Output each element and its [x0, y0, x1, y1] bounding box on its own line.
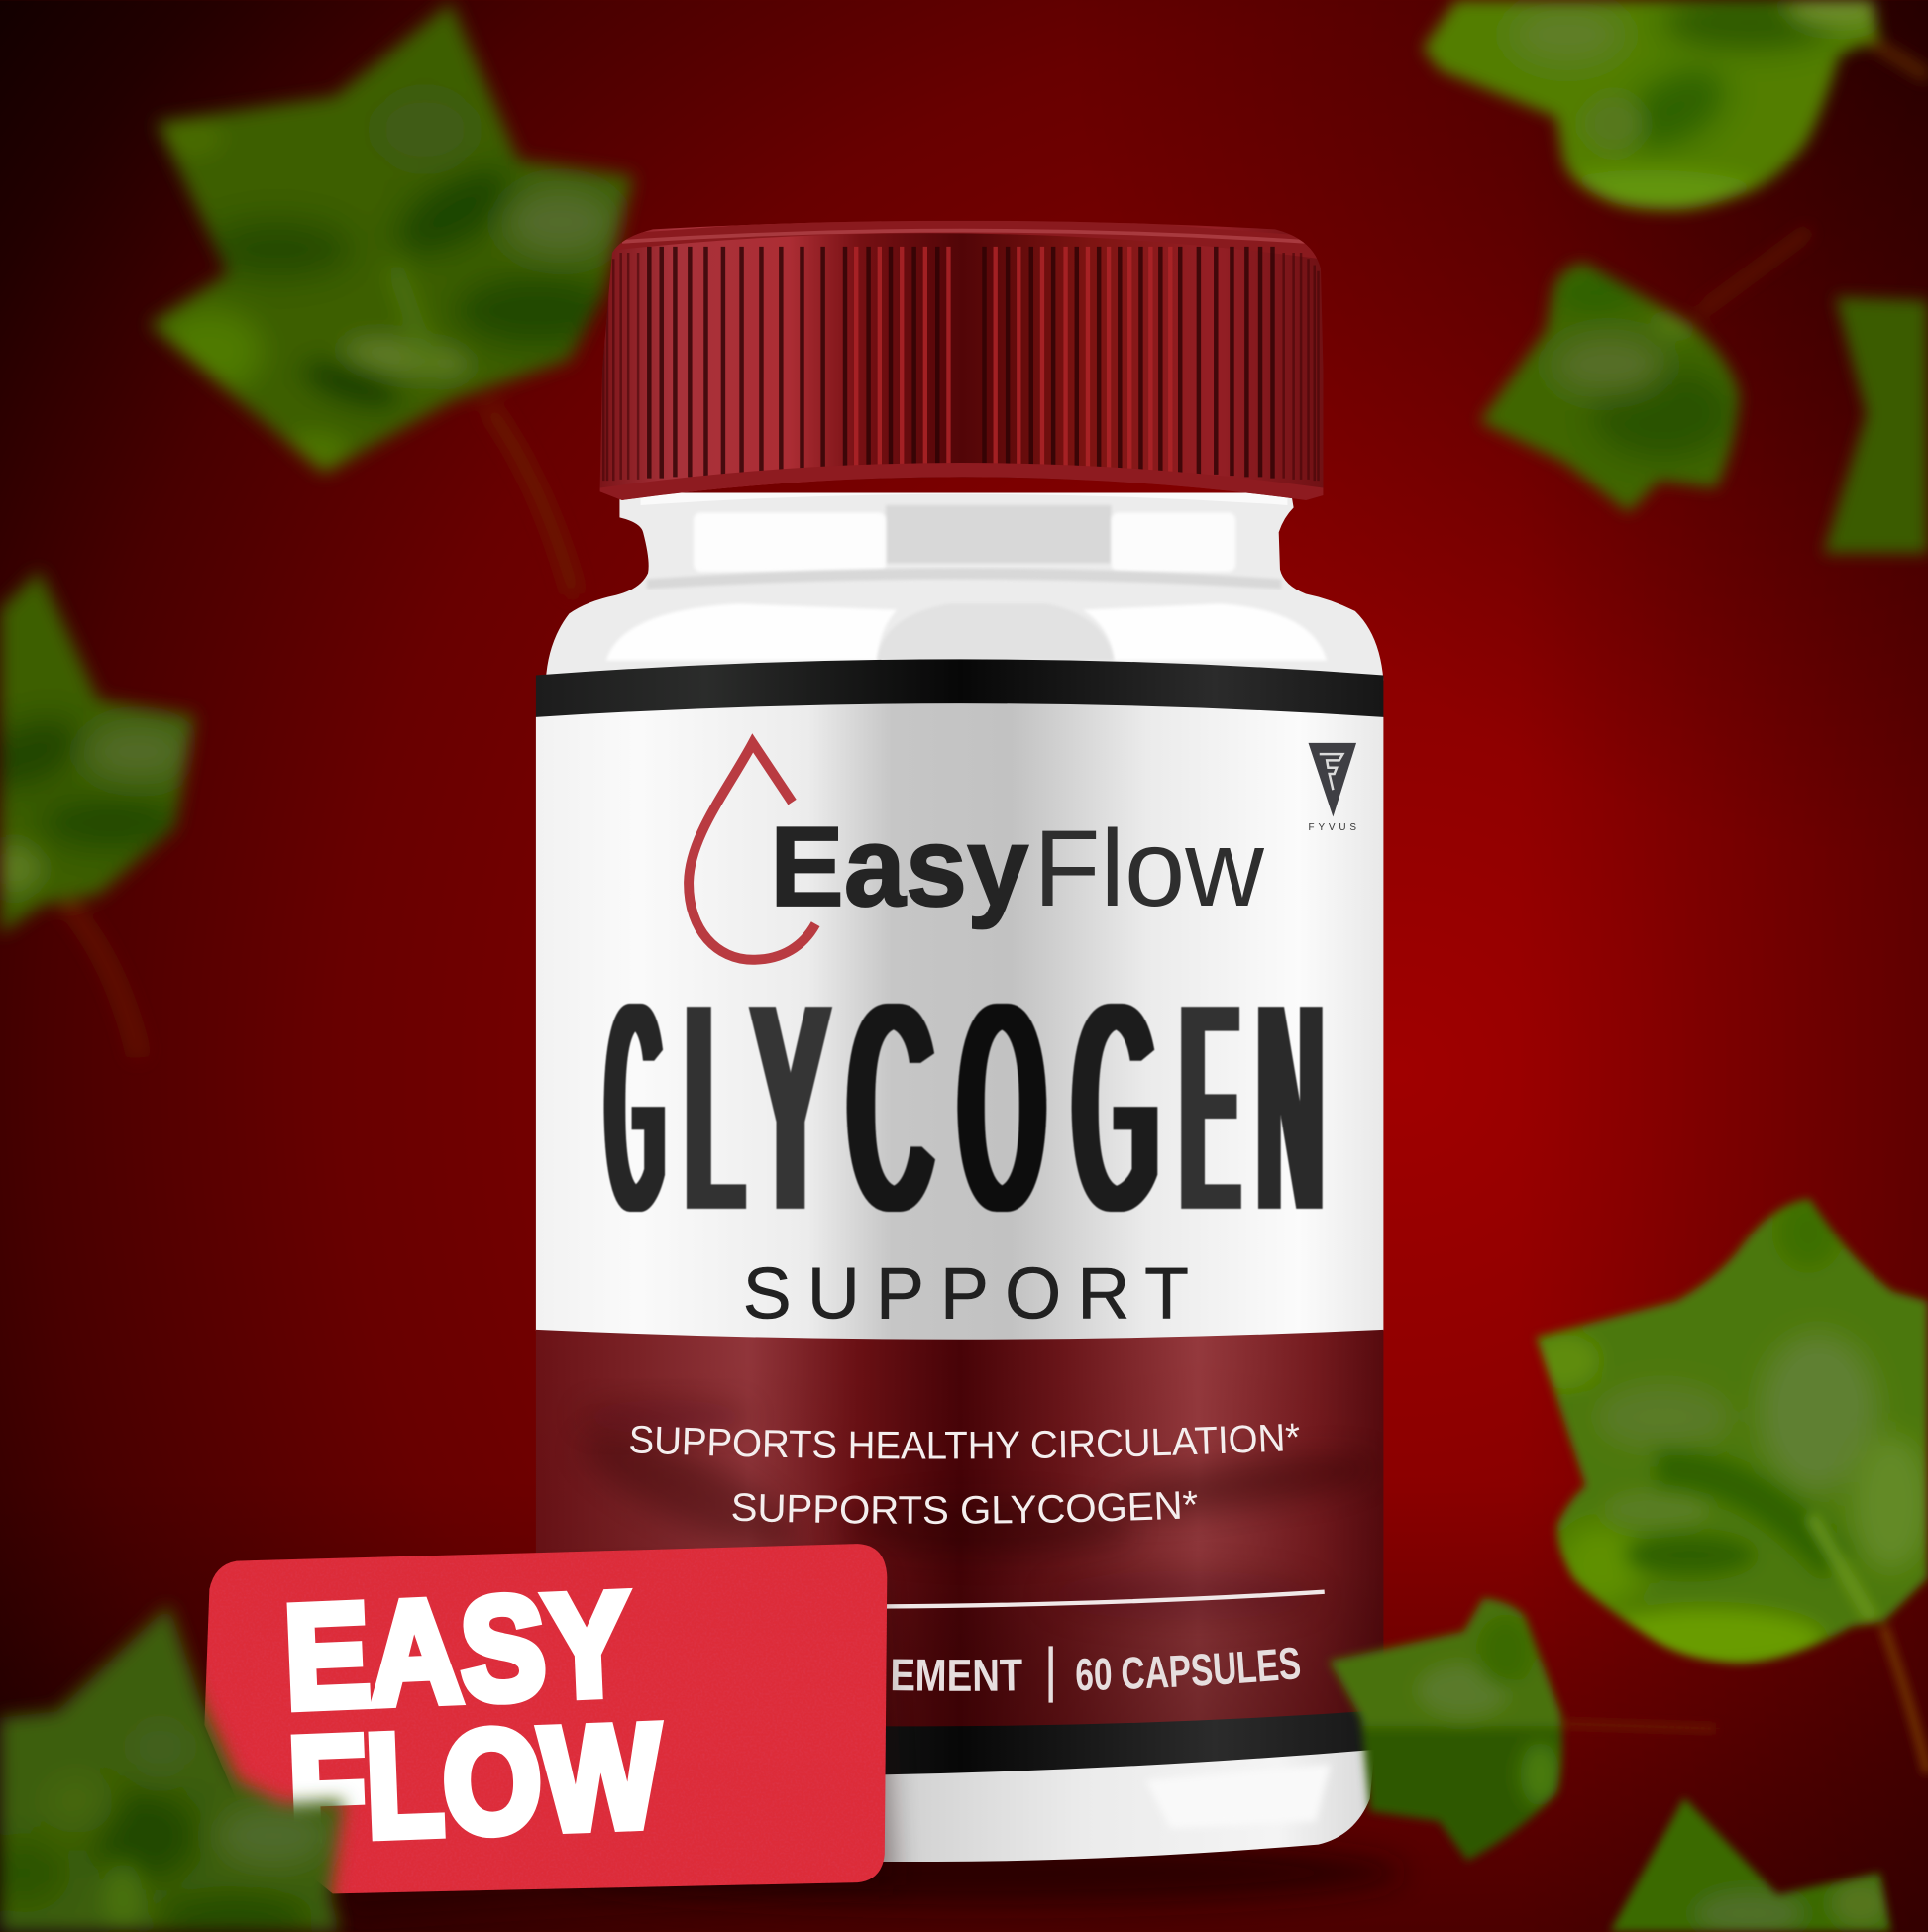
product title: GLYCOGEN: E — [1181, 935, 1239, 1279]
product title: GLYCOGEN — [606, 935, 1323, 1279]
label: capsule count: 60 CAPSULES — [1076, 1647, 1300, 1690]
bottle neck and shoulder — [546, 493, 1383, 681]
leaf: bottom centre-right, over bottle — [1330, 1598, 1716, 1863]
leaf: bottom right large — [1530, 1198, 1928, 1772]
lower black band — [536, 1710, 1383, 1778]
leaf: top left — [149, 3, 633, 593]
product bottle — [495, 220, 1423, 1920]
leaf: left edge — [0, 571, 194, 1057]
bottle base — [536, 1750, 1375, 1862]
claim: glycogen: SUPPORTS GLYCOGEN* — [732, 1490, 1197, 1524]
badge text: EASY: EASY — [281, 1562, 633, 1740]
product title: GLYCOGEN: O — [958, 935, 1046, 1279]
leaf: top right — [1423, 0, 1928, 219]
product title: GLYCOGEN: Y — [750, 935, 831, 1279]
red lower label panel — [536, 1330, 1383, 1728]
bottle shadow — [567, 1841, 1405, 1905]
bottle cap — [600, 210, 1323, 500]
leaf: bottom left, over badge — [0, 1605, 344, 1932]
product title: GLYCOGEN: L — [686, 935, 744, 1279]
logo: Easy: Easy — [770, 804, 1028, 930]
product title: GLYCOGEN: G — [1072, 935, 1159, 1279]
product title: GLYCOGEN: C — [847, 935, 934, 1279]
base highlight — [1145, 1765, 1331, 1828]
leaf: right edge — [1823, 297, 1928, 553]
logo: blood drop — [689, 743, 815, 960]
brand mark: Fyvus — [1309, 743, 1356, 833]
white label panel — [536, 703, 1383, 1341]
brand mark: Fyvus: FYVUS — [1309, 822, 1356, 833]
product bottle: N — [1257, 935, 1323, 1279]
logo: Flow: Flow — [1033, 808, 1265, 929]
leaf: right middle — [1479, 231, 1810, 512]
badge shadow — [234, 1571, 894, 1917]
label: supplement fragment: EMENT — [892, 1659, 1022, 1691]
subtitle: SUPPORT: SUPPORT — [743, 1253, 1189, 1335]
badge paper texture — [197, 1540, 894, 1903]
label: vertical divider — [1049, 1646, 1052, 1703]
leaf: bottom right corner — [1610, 1797, 1891, 1932]
label divider line — [862, 1592, 1325, 1607]
upper black band — [536, 659, 1383, 719]
badge body — [204, 1544, 887, 1893]
claim: circulation: SUPPORTS HEALTHY CIRCULATION* — [630, 1423, 1300, 1458]
product title: GLYCOGEN: G — [606, 935, 664, 1279]
badge text: FLOW: FLOW — [285, 1694, 664, 1872]
red badge — [197, 1540, 894, 1917]
